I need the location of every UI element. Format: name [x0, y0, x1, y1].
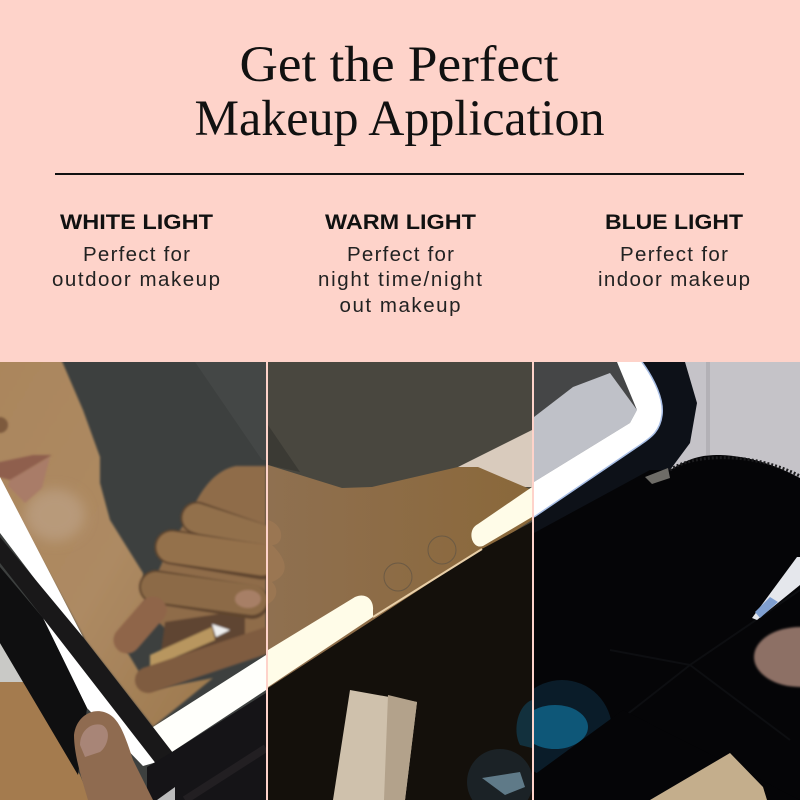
fingertip [754, 627, 800, 687]
mirror reflection [534, 362, 637, 482]
fingers [127, 518, 268, 680]
title: Makeup Application [194, 91, 604, 147]
hand [127, 466, 268, 680]
text: warm light description: night time/night [318, 268, 482, 291]
jar lid [467, 749, 533, 800]
lipstick box [333, 690, 417, 800]
warm light strips [268, 595, 373, 687]
blue light ring [534, 362, 662, 517]
heading: warm light: WARM LIGHT [325, 211, 476, 234]
blue container edge [516, 700, 532, 748]
text: warm light description [318, 243, 482, 317]
text: blue light description: Perfect for [620, 243, 728, 266]
photo panel: warm light [268, 362, 533, 800]
text: blue light description [598, 243, 750, 291]
lower arm skin [0, 682, 90, 800]
photo panel: blue light [512, 362, 800, 800]
text: blue light description: indoor makeup [598, 268, 750, 291]
case lid frame with zipper [534, 362, 697, 540]
nose shadow [0, 417, 8, 433]
column: warm light [318, 211, 482, 317]
title [194, 37, 604, 147]
face and neck [0, 352, 213, 727]
mirror light strips [0, 477, 83, 637]
blue jar [534, 680, 610, 773]
interior fold lines [610, 590, 800, 740]
heading divider rule [55, 173, 744, 175]
case black body [268, 522, 532, 800]
white clothing [0, 643, 23, 682]
text: white light description [52, 243, 220, 291]
case interior [534, 455, 800, 800]
lips [0, 455, 52, 503]
thumb [74, 711, 153, 800]
text: white light description: Perfect for [83, 243, 190, 266]
wrist and arm [268, 465, 532, 690]
white cosmetic tube [752, 557, 800, 620]
text: warm light description: out makeup [340, 294, 460, 317]
background: pink header [0, 0, 800, 362]
mirror frame [0, 537, 172, 762]
fingertips [268, 520, 285, 604]
text: white light description: outdoor makeup [52, 268, 220, 291]
beige product [650, 753, 767, 800]
heading: white light: WHITE LIGHT [60, 211, 213, 234]
photo panel: white light [0, 352, 268, 800]
text: warm light description: Perfect for [347, 243, 454, 266]
touch icon: brightness [384, 563, 412, 591]
touch icon: color mode [428, 536, 456, 564]
title: Get the Perfect [240, 37, 558, 93]
column: white light [52, 211, 220, 291]
column: blue light [598, 211, 750, 291]
white sleeve [458, 430, 532, 487]
heading: blue light: BLUE LIGHT [605, 211, 743, 234]
chin shading [25, 489, 85, 541]
zipper pull [645, 468, 670, 484]
